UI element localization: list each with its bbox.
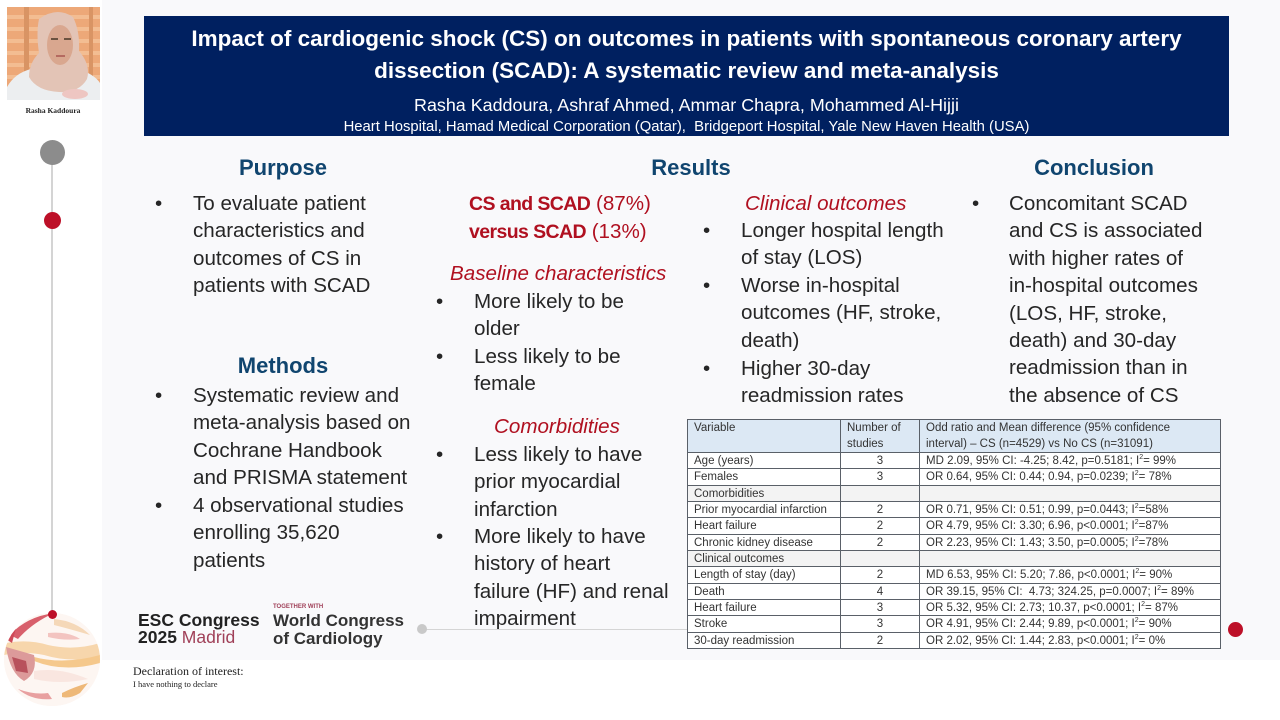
baseline characteristics: older (474, 317, 520, 340)
baseline characteristics: female (474, 372, 536, 395)
globe red node (48, 610, 57, 619)
results table: Heart failure (694, 520, 757, 532)
results table: 30-day readmission (694, 634, 794, 646)
conclusion text: • (972, 192, 979, 215)
baseline characteristics (436, 262, 666, 395)
title (191, 26, 1182, 82)
results table: MD 2.09, 95% CI: -4.25; 8.42, p=0.5181; I2= 99% (926, 454, 1176, 467)
results table: OR 39.15, 95% CI: 4.73; 324.25, p=0.0007; I2= 89% (926, 585, 1194, 598)
results table: interval) – CS (n=4529) vs No CS (n=31091) (926, 438, 1153, 450)
heading: conclusion: Conclusion (1034, 155, 1154, 180)
conclusion text: (LOS, HF, stroke, (1009, 302, 1167, 325)
clinical outcomes: • (703, 219, 710, 242)
purpose text: characteristics and (193, 219, 365, 242)
methods text: meta-analysis based on (193, 411, 411, 434)
comorbidities: Comorbidities (494, 415, 620, 438)
results table: Females (694, 471, 738, 483)
results table: OR 0.64, 95% CI: 0.44; 0.94, p=0.0239; I2= 78% (926, 471, 1172, 483)
conclusion text: and CS is associated (1009, 219, 1202, 242)
comorbidities: More likely to have (474, 525, 646, 548)
results table: Length of stay (day) (694, 569, 796, 581)
title banner (144, 16, 1229, 136)
comorbidities: • (436, 525, 443, 548)
methods text: Cochrane Handbook (193, 439, 382, 462)
timeline line (51, 152, 53, 617)
purpose text: outcomes of CS in (193, 247, 361, 270)
results table: Odd ratio and Mean difference (95% confidence (926, 422, 1170, 434)
results table: MD 6.53, 95% CI: 5.20; 7.86, p<0.0001; I2= 90% (926, 568, 1172, 581)
comparison text (469, 192, 651, 243)
purpose text: • (155, 192, 162, 215)
methods text (155, 384, 411, 572)
results table: 3 (877, 602, 883, 614)
results table: OR 0.71, 95% CI: 0.51; 0.99, p=0.0443; I2=58% (926, 503, 1168, 516)
heading: methods: Methods (238, 353, 328, 378)
horizontal grey node (417, 624, 427, 634)
affiliations: Heart Hospital, Hamad Medical Corporation (Qatar), Bridgeport Hospital, Yale New Haven Health (USA) (344, 119, 1029, 135)
results table: OR 2.02, 95% CI: 1.44; 2.83, p<0.0001; I2= 0% (926, 634, 1165, 646)
results table: Stroke (694, 618, 727, 630)
results table: Clinical outcomes (694, 553, 784, 565)
results table: Prior myocardial infarction (694, 504, 827, 516)
results table: 3 (877, 618, 883, 630)
clinical outcomes: readmission rates (741, 384, 904, 407)
results table: Death (694, 586, 725, 598)
comparison text: CS and SCAD (87%) (469, 192, 651, 215)
congress logo: ESC: ESC Congress (138, 610, 260, 630)
congress logo: World Congress (273, 604, 404, 648)
decorative globe (4, 613, 100, 706)
results table: Chronic kidney disease (694, 537, 813, 549)
title: Impact of cardiogenic shock (CS) on outcomes in patients with spontaneous coronary artery (191, 26, 1182, 51)
congress logo: ESC: 2025 Madrid (138, 627, 235, 647)
conclusion text (972, 192, 1202, 407)
conclusion text: Concomitant SCAD (1009, 192, 1188, 215)
comorbidities (436, 415, 669, 630)
conclusion text: readmission than in (1009, 356, 1188, 379)
clinical outcomes: Clinical outcomes (745, 192, 906, 215)
methods text: Systematic review and (193, 384, 399, 407)
results table: 2 (877, 569, 883, 581)
conclusion text: with higher rates of (1009, 247, 1183, 270)
comorbidities: prior myocardial (474, 470, 620, 493)
congress logo: World Congress: of Cardiology (273, 629, 383, 648)
results table: 2 (877, 537, 883, 549)
results table: Heart failure (694, 602, 757, 614)
results table: 3 (877, 471, 883, 483)
methods text: patients (193, 549, 265, 572)
methods text: 4 observational studies (193, 494, 404, 517)
heading: purpose: Purpose (239, 155, 327, 180)
results table: OR 2.23, 95% CI: 1.43; 3.50, p=0.0005; I2=78% (926, 536, 1168, 549)
horizontal timeline line (422, 629, 687, 630)
comorbidities: infarction (474, 498, 558, 521)
methods text: enrolling 35,620 (193, 521, 340, 544)
congress logo: World Congress: World Congress (273, 611, 404, 630)
conclusion text: the absence of CS (1009, 384, 1178, 407)
baseline characteristics: Baseline characteristics (450, 262, 666, 285)
results table: OR 4.79, 95% CI: 3.30; 6.96, p<0.0001; I2=87% (926, 519, 1168, 532)
clinical outcomes (703, 192, 944, 407)
horizontal red node (1228, 622, 1243, 637)
purpose text (155, 192, 370, 297)
title: dissection (SCAD): A systematic review and meta-analysis (374, 58, 999, 82)
congress logo: World Congress: TOGETHER WITH (273, 604, 323, 610)
authors: Rasha Kaddoura, Ashraf Ahmed, Ammar Chapra, Mohammed Al-Hijji (414, 95, 959, 115)
presenter name: Rasha Kaddoura (26, 106, 80, 115)
results table: Number of (847, 422, 901, 434)
portrait photo of presenter (7, 7, 100, 100)
results table: Comorbidities (694, 488, 764, 500)
methods text: • (155, 384, 162, 407)
results table: OR 4.91, 95% CI: 2.44; 9.89, p<0.0001; I2= 90% (926, 617, 1172, 630)
clinical outcomes: • (703, 357, 710, 380)
results table: Age (years) (694, 455, 753, 467)
timeline red node (44, 212, 61, 229)
baseline characteristics: Less likely to be (474, 345, 621, 368)
comorbidities: Less likely to have (474, 443, 642, 466)
baseline characteristics: • (436, 290, 443, 313)
comorbidities: • (436, 443, 443, 466)
clinical outcomes: of stay (LOS) (741, 246, 862, 269)
comparison text: versus SCAD (13%) (469, 220, 647, 243)
results table: OR 5.32, 95% CI: 2.73; 10.37, p<0.0001; I2= 87% (926, 601, 1178, 614)
timeline grey node (40, 140, 65, 165)
results table: 2 (877, 520, 883, 532)
comorbidities: history of heart (474, 552, 610, 575)
clinical outcomes: • (703, 274, 710, 297)
clinical outcomes: outcomes (HF, stroke, (741, 301, 941, 324)
baseline characteristics: • (436, 345, 443, 368)
declaration of interest heading: Declaration of interest: (133, 664, 244, 678)
results table: 4 (877, 586, 883, 598)
baseline characteristics: More likely to be (474, 290, 624, 313)
declaration text: I have nothing to declare (133, 679, 218, 689)
congress logo: ESC (138, 610, 260, 647)
clinical outcomes: Worse in-hospital (741, 274, 900, 297)
results table (687, 419, 1221, 649)
conclusion text: death) and 30-day (1009, 329, 1176, 352)
clinical outcomes: death) (741, 329, 799, 352)
comorbidities: impairment (474, 607, 576, 630)
results table: 2 (877, 504, 883, 516)
purpose text: patients with SCAD (193, 274, 370, 297)
results table: 3 (877, 455, 883, 467)
methods text: • (155, 494, 162, 517)
comorbidities: failure (HF) and renal (474, 580, 669, 603)
clinical outcomes: Higher 30-day (741, 357, 870, 380)
heading: results: Results (651, 155, 731, 180)
results table: Variable (694, 422, 735, 434)
results table: studies (847, 438, 883, 450)
clinical outcomes: Longer hospital length (741, 219, 944, 242)
conclusion text: in-hospital outcomes (1009, 274, 1198, 297)
results table: 2 (877, 634, 883, 646)
methods text: and PRISMA statement (193, 466, 407, 489)
purpose text: To evaluate patient (193, 192, 366, 215)
